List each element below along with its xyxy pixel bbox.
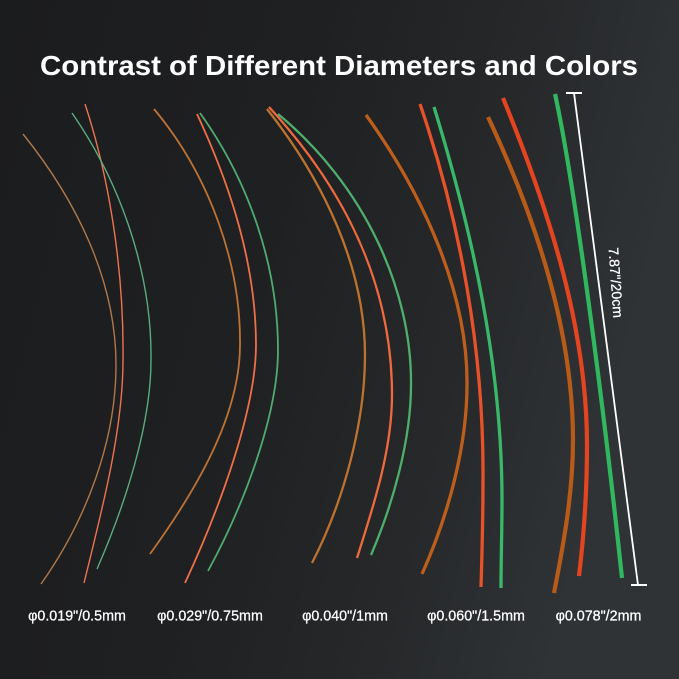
fiber: amber 2mm — [488, 117, 573, 593]
fiber: orange 0.75mm — [185, 114, 256, 583]
fiber: amber 0.75mm — [150, 109, 240, 554]
diameter label: 2mm: φ0.078"/2mm — [556, 608, 641, 624]
fiber: amber 1mm — [267, 109, 365, 563]
fiber: green 1mm — [278, 114, 411, 555]
fiber group: 0.5mm — [23, 104, 151, 584]
fiber: green 0.5mm — [72, 113, 151, 569]
fiber group: 1mm — [267, 107, 411, 563]
fiber group: 1.5mm — [366, 104, 502, 588]
fiber: amber 1.5mm — [366, 115, 467, 574]
fiber: orange 0.5mm — [84, 104, 123, 583]
fiber: orange 1mm — [269, 107, 392, 558]
fiber: red 2mm — [503, 98, 587, 576]
fiber: green 2mm — [555, 94, 622, 578]
fiber group: 2mm — [488, 94, 622, 593]
fiber: amber 0.5mm — [23, 134, 116, 584]
dimension bar: length — [566, 93, 647, 585]
diameter label: 1.5mm: φ0.060"/1.5mm — [427, 608, 525, 624]
fiber group: 0.75mm — [150, 109, 278, 583]
fiber: orange-red 1.5mm — [420, 104, 483, 587]
fiber: green 0.75mm — [200, 113, 278, 571]
diameter label: 0.5mm: φ0.019"/0.5mm — [28, 608, 126, 624]
diameter label: 1mm: φ0.040"/1mm — [302, 608, 388, 624]
length label: 7.87"/20cm — [606, 247, 626, 318]
fiber: green 1.5mm — [434, 107, 502, 588]
diameter label: 0.75mm: φ0.029"/0.75mm — [157, 608, 263, 624]
title: Contrast of Different Diameters and Colors — [40, 50, 638, 81]
